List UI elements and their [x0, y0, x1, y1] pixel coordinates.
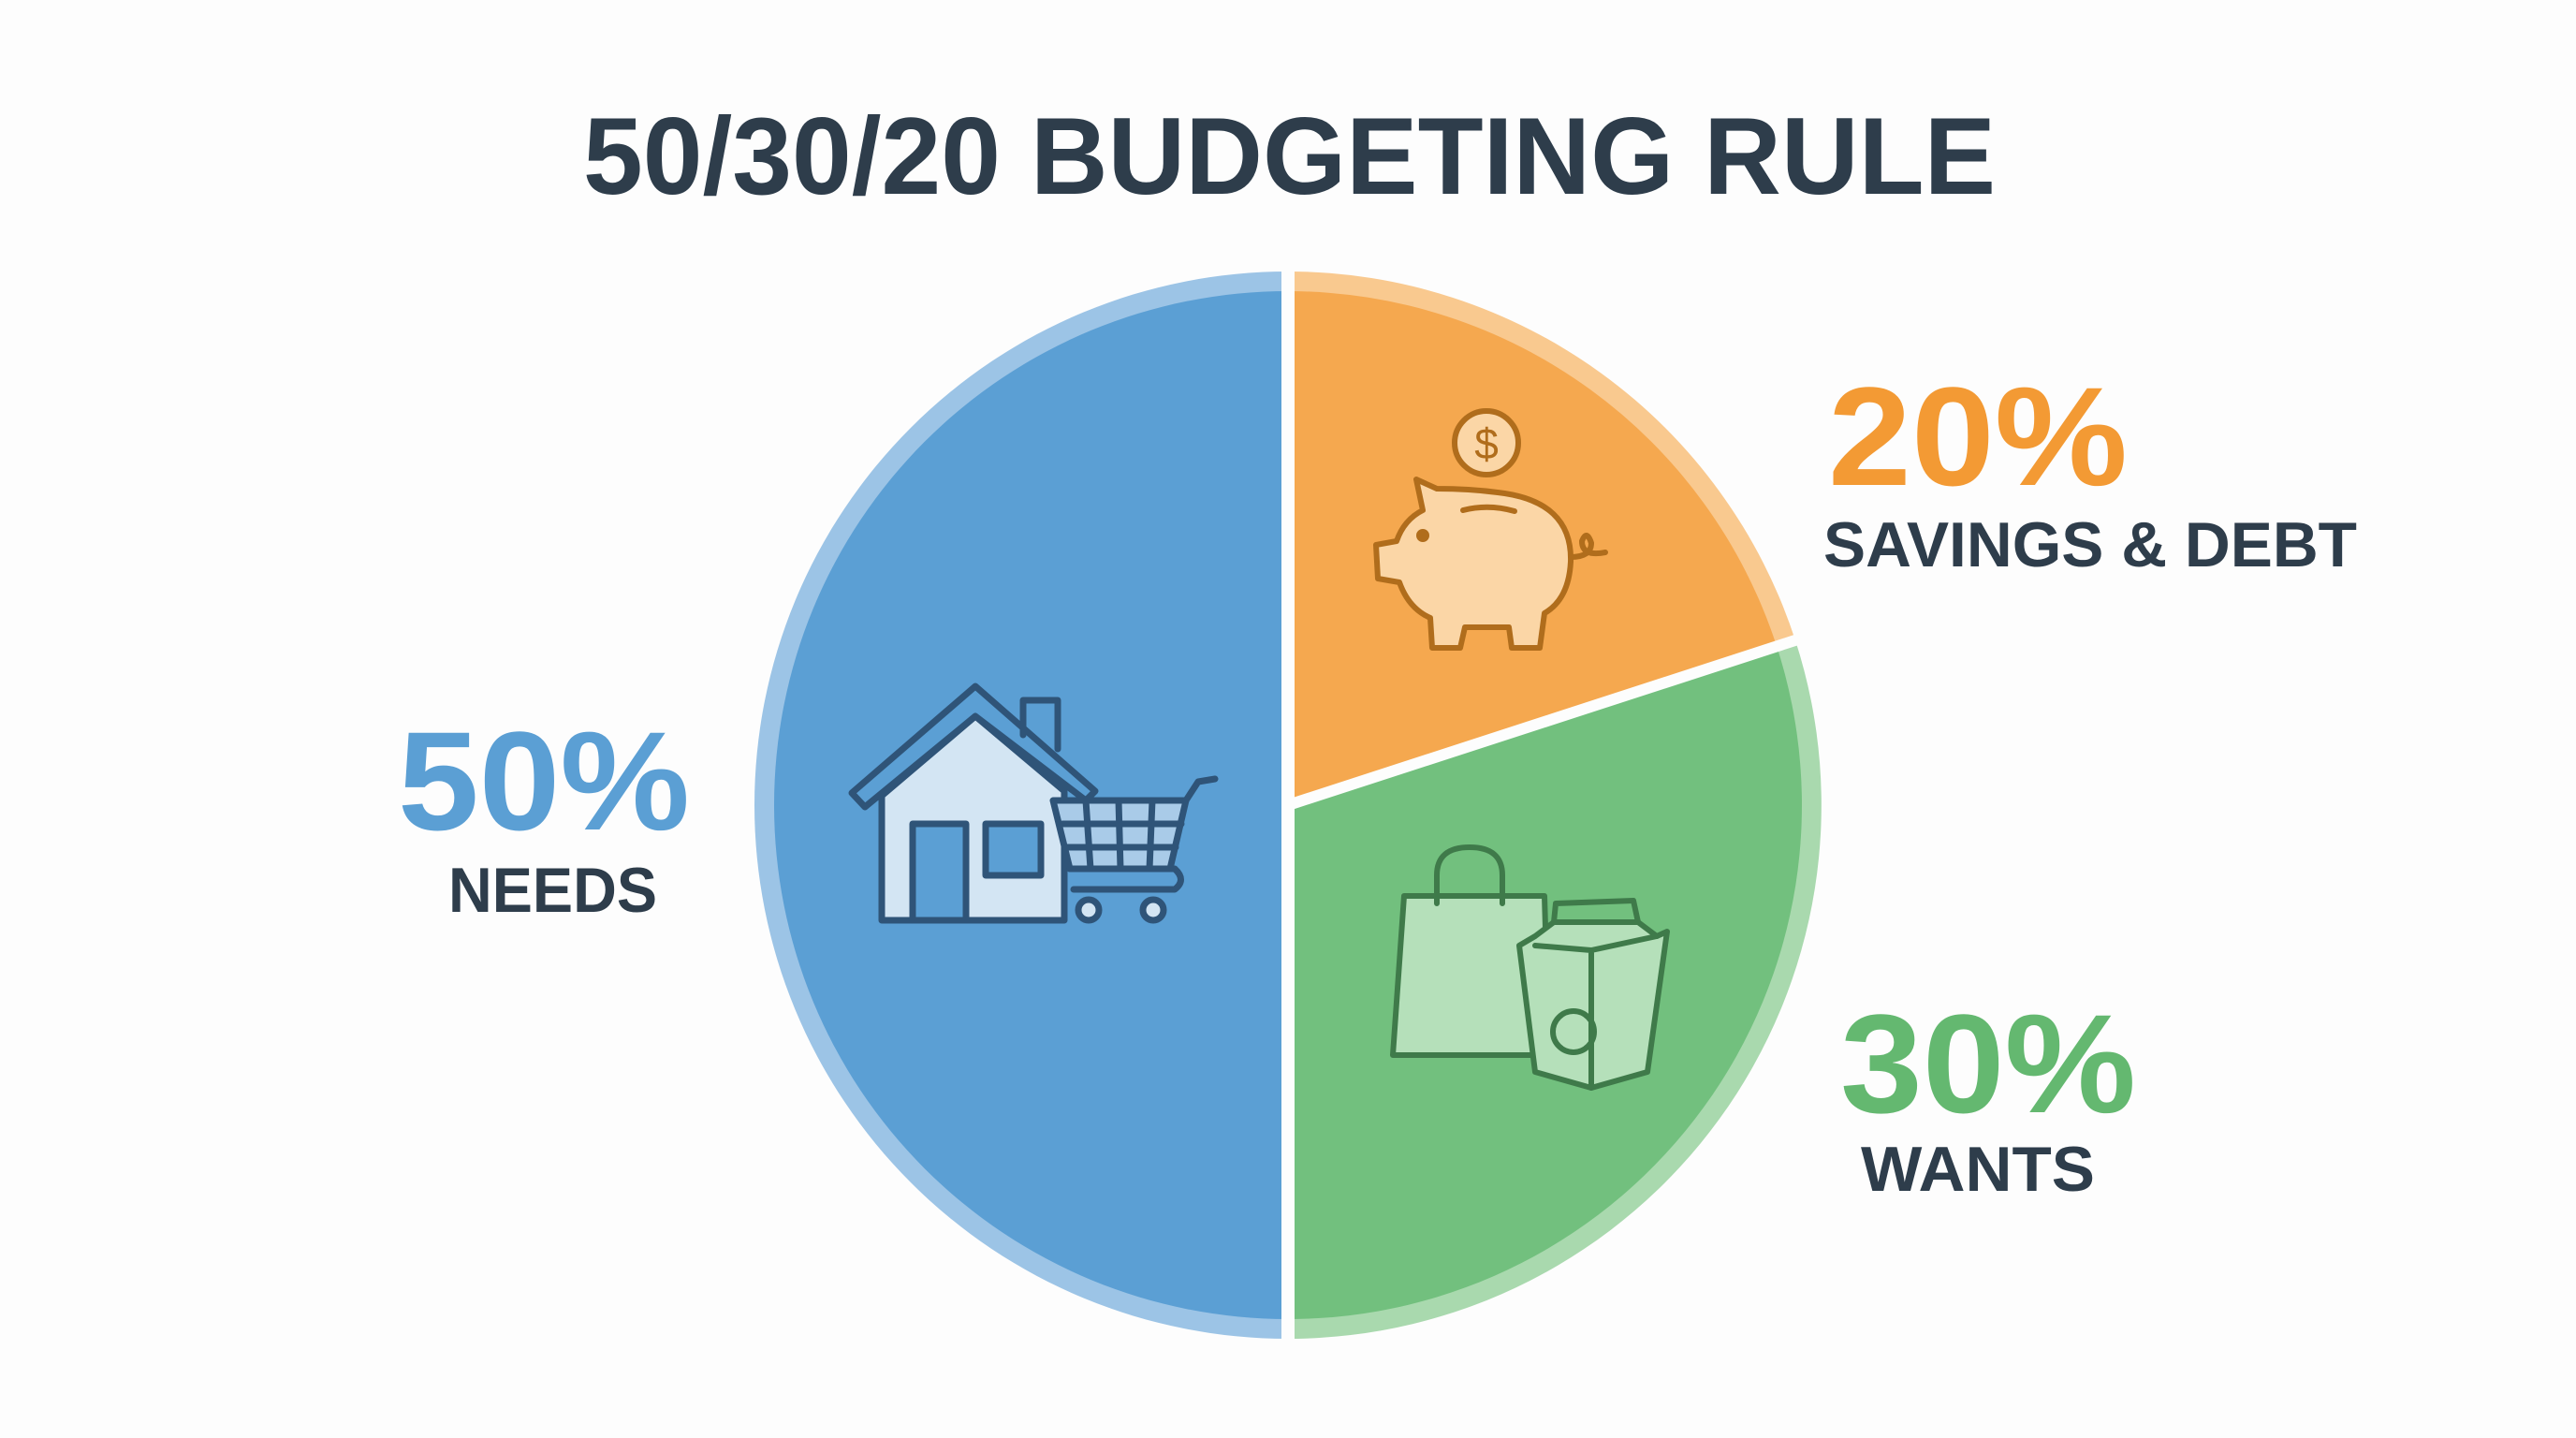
label: 30% wants: WANTS — [1861, 1134, 2095, 1205]
title: 50/30/20 BUDGETING RULE — [583, 95, 1996, 217]
icon: shopping bag and takeout box — [1393, 847, 1667, 1088]
label: 50% needs: 50% — [398, 702, 690, 859]
label: 30% wants: 30% — [1840, 985, 2136, 1142]
label: 30% wants — [1840, 985, 2136, 1205]
slice: savings — [1288, 271, 1795, 805]
label: 20% savings: 20% — [1828, 358, 2128, 515]
icon: piggy bank — [1376, 411, 1605, 648]
pie chart — [754, 262, 1822, 1348]
slice: needs — [754, 271, 1288, 1339]
slice: wants — [1288, 640, 1822, 1339]
label: 20% savings — [1823, 358, 2357, 580]
label: 50% needs — [398, 702, 690, 926]
icon: house and cart — [852, 686, 1215, 920]
label: 20% savings: SAVINGS & DEBT — [1823, 509, 2357, 580]
icon: piggy bank: $ — [1474, 419, 1499, 468]
label: 50% needs: NEEDS — [448, 855, 657, 926]
